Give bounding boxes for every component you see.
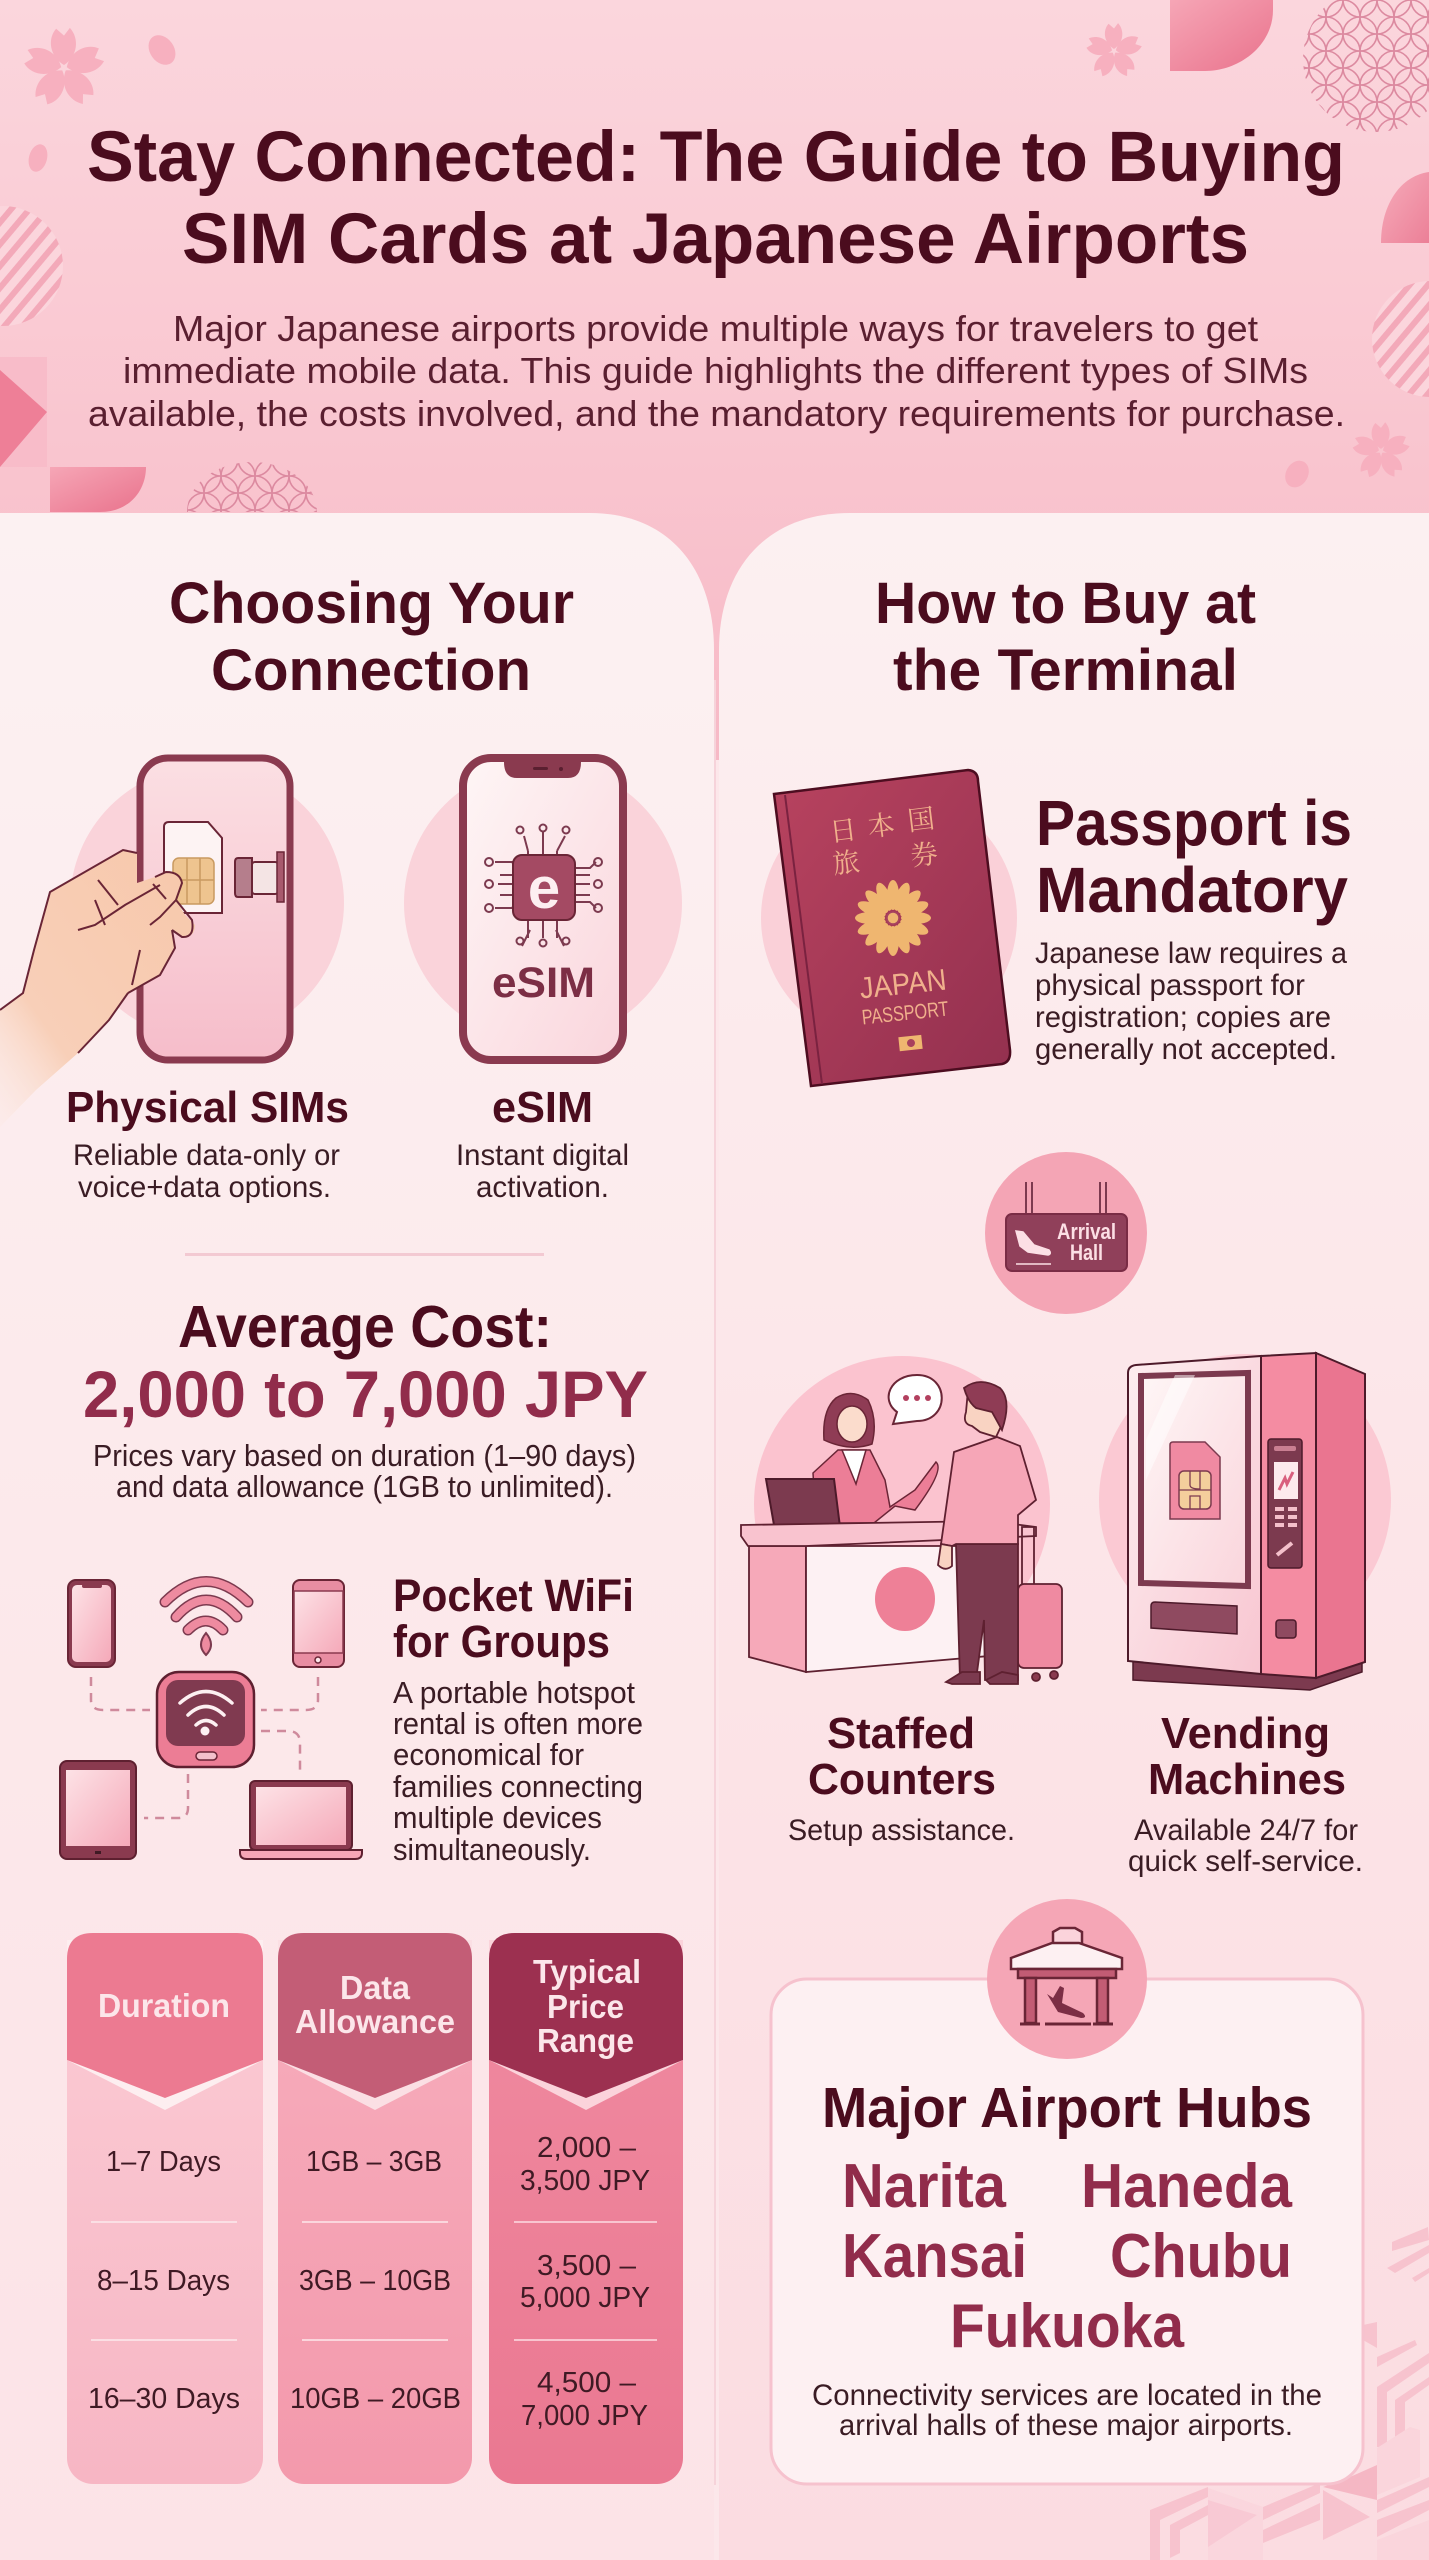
pocket WiFi text: economical for <box>393 1737 584 1772</box>
striped circle right <box>1372 281 1429 397</box>
chevron square left <box>0 357 47 467</box>
speech bubble <box>889 1375 942 1424</box>
row values: 3,500 – <box>537 2250 637 2282</box>
circuit traces <box>485 824 602 946</box>
label: vending machines: Vending <box>1161 1709 1330 1758</box>
label: physical SIMs: voice+data options. <box>78 1171 331 1204</box>
pink D shape <box>1170 0 1273 71</box>
airport names: Fukuoka <box>950 2292 1184 2361</box>
section heading: how to buy at the terminal: How to Buy at <box>875 571 1256 636</box>
label: eSIM: activation. <box>476 1171 609 1204</box>
column header <box>489 1933 683 2110</box>
column header: Allowance <box>295 2003 455 2040</box>
icon: arrival hall sign: Arrival <box>1057 1219 1116 1244</box>
chip with e: e <box>528 856 560 921</box>
hand outline <box>0 850 193 1053</box>
column header: Range <box>537 2022 634 2059</box>
row values: 16–30 Days <box>88 2383 240 2415</box>
label: eSIM: eSIM <box>492 1083 593 1132</box>
average cost block: Prices vary based on duration (1–90 days) <box>93 1438 636 1473</box>
column header: Data <box>340 1969 411 2006</box>
SIM card <box>164 822 222 913</box>
panel: choosing your connection <box>0 513 714 2560</box>
passport text: Japanese law requires a <box>1035 937 1347 970</box>
illustration: vending machine <box>1099 1353 1391 1690</box>
japanese characters <box>827 797 940 882</box>
title: Stay Connected: The Guide to Buying <box>87 118 1345 197</box>
eSIM label on phone: eSIM <box>492 959 595 1007</box>
label: staffed counters <box>788 1709 1015 1847</box>
passport text: Mandatory <box>1036 854 1348 926</box>
label: eSIM: Instant digital <box>456 1139 629 1172</box>
row values: 3GB – 10GB <box>299 2265 451 2297</box>
icon: cherry blossom top right <box>1085 23 1143 79</box>
panel: how to buy at the terminal <box>719 513 1429 2560</box>
phone body <box>463 758 623 1060</box>
laptop <box>240 1781 362 1859</box>
phone left <box>68 1580 115 1667</box>
spine line <box>785 795 822 1084</box>
pocket WiFi text: A portable hotspot <box>393 1675 635 1710</box>
average cost block: 2,000 to 7,000 JPY <box>83 1357 648 1431</box>
phone <box>140 758 290 1060</box>
section heading: choosing your connection: Connection <box>211 638 531 703</box>
wifi icon <box>165 1582 248 1655</box>
icon: petal right <box>1280 456 1314 492</box>
label: physical SIMs <box>66 1083 349 1204</box>
hub note: Connectivity services are located in the <box>812 2379 1322 2412</box>
average cost block: Average Cost: <box>178 1294 552 1360</box>
passport text: Passport is <box>1036 787 1352 859</box>
passport text: physical passport for <box>1035 969 1305 1002</box>
intro paragraph <box>88 308 1345 434</box>
pocket WiFi text: multiple devices <box>393 1800 602 1835</box>
illustration: pocket WiFi network <box>60 1580 362 1859</box>
airport names: Kansai <box>842 2222 1027 2291</box>
japanese characters: 日 <box>827 808 859 850</box>
illustration: physical SIM phone and hand <box>0 758 344 1127</box>
passport text <box>1035 787 1352 1066</box>
illustration: passport <box>761 770 1017 1086</box>
icon: arrival hall sign <box>985 1152 1147 1314</box>
column body <box>67 1933 263 2484</box>
traveller <box>938 1382 1062 1684</box>
label: vending machines <box>1128 1709 1363 1878</box>
label: physical SIMs: Physical SIMs <box>66 1083 349 1132</box>
passport wording: JAPAN <box>858 964 948 1005</box>
label: vending machines: Machines <box>1148 1755 1346 1804</box>
label: staffed counters: Staffed <box>827 1709 975 1758</box>
icon: airport terminal <box>987 1899 1147 2059</box>
dashed connectors <box>91 1677 318 1818</box>
chrysanthemum emblem <box>855 880 931 956</box>
row values <box>88 2146 240 2415</box>
icon: cherry blossom right <box>1351 422 1411 480</box>
row values: 1GB – 3GB <box>306 2146 442 2178</box>
airport names <box>842 2152 1292 2361</box>
tablet <box>60 1761 136 1859</box>
shippo half circle bottom <box>187 462 317 512</box>
average cost block: and data allowance (1GB to unlimited). <box>116 1469 613 1504</box>
background circle <box>404 764 682 1042</box>
label: eSIM <box>456 1083 629 1204</box>
column header: Duration <box>98 1987 230 2024</box>
section heading: how to buy at the terminal: the Terminal <box>893 638 1238 703</box>
japanese characters: 券 <box>908 832 940 874</box>
title: SIM Cards at Japanese Airports <box>182 200 1249 279</box>
japanese characters: 旅 <box>830 840 862 882</box>
illustration: staffed counter <box>741 1356 1062 1684</box>
shippo circle top right <box>1303 0 1429 132</box>
label: physical SIMs: Reliable data-only or <box>73 1139 340 1172</box>
agent <box>813 1393 938 1523</box>
hub note: arrival halls of these major airports. <box>839 2409 1293 2442</box>
japanese characters: 本 <box>865 803 897 845</box>
column header <box>278 1933 472 2110</box>
icon: cherry blossom top left <box>22 28 106 108</box>
table column: data allowance <box>278 1933 472 2484</box>
hub note <box>812 2379 1322 2442</box>
row values: 5,000 JPY <box>520 2282 650 2314</box>
airport names: Haneda <box>1081 2152 1292 2221</box>
table column: duration <box>67 1933 263 2484</box>
column header: Price <box>547 1988 624 2025</box>
icon: petal left <box>26 142 50 174</box>
passport cover <box>774 770 1010 1086</box>
biometric chip symbol <box>898 1035 923 1051</box>
passport text: registration; copies are <box>1035 1001 1331 1034</box>
row values <box>520 2132 650 2432</box>
control panel <box>1268 1439 1302 1568</box>
chip with e <box>513 855 575 921</box>
monitor <box>766 1479 840 1527</box>
intro paragraph: Major Japanese airports provide multiple ways for travelers to get <box>173 308 1258 349</box>
pocket WiFi text: rental is often more <box>393 1706 643 1741</box>
header background <box>0 0 1429 760</box>
row values: 7,000 JPY <box>521 2400 648 2432</box>
label: staffed counters: Counters <box>808 1755 996 1804</box>
section heading: choosing your connection <box>169 571 574 703</box>
coin return <box>1276 1620 1296 1638</box>
table column: typical price range <box>489 1933 683 2484</box>
pocket WiFi text <box>393 1570 643 1867</box>
SIM on screen <box>1170 1442 1220 1519</box>
background circle <box>1099 1354 1391 1646</box>
label: vending machines: quick self-service. <box>1128 1845 1363 1878</box>
intro paragraph: immediate mobile data. This guide highlights the different types of SIMs <box>123 350 1308 391</box>
row values <box>290 2146 461 2415</box>
row values: 1–7 Days <box>106 2146 221 2178</box>
card <box>771 1979 1363 2484</box>
label: vending machines: Available 24/7 for <box>1134 1814 1358 1847</box>
section heading: how to buy at the terminal <box>875 571 1256 703</box>
passport text: generally not accepted. <box>1035 1033 1337 1066</box>
retrieval slot <box>1151 1602 1237 1634</box>
cabinet <box>1128 1353 1365 1678</box>
pocket WiFi text: families connecting <box>393 1769 643 1804</box>
average cost block <box>83 1294 648 1504</box>
row values: 10GB – 20GB <box>290 2383 461 2415</box>
background circle <box>70 766 344 1040</box>
japanese characters: 国 <box>905 797 937 839</box>
column header <box>67 1933 263 2110</box>
background circle <box>754 1356 1050 1652</box>
rounded square left <box>50 467 146 512</box>
airport names: Chubu <box>1110 2222 1292 2291</box>
icon: arrival hall sign: Hall <box>1070 1240 1103 1265</box>
row values: 2,000 – <box>537 2132 637 2164</box>
hub heading: Major Airport Hubs <box>822 2076 1312 2140</box>
pocket WiFi text: for Groups <box>393 1616 610 1667</box>
plane <box>1047 1986 1085 2018</box>
counter <box>741 1521 1036 1672</box>
column body <box>278 1933 472 2484</box>
notch <box>504 762 581 778</box>
pocket router <box>157 1672 254 1767</box>
hand <box>0 850 195 1127</box>
striped circle left <box>0 206 63 326</box>
phone right <box>293 1580 344 1667</box>
column body <box>489 1933 683 2484</box>
row values: 4,500 – <box>537 2367 637 2399</box>
pocket WiFi text: Pocket WiFi <box>393 1570 634 1621</box>
airport names: Narita <box>842 2152 1006 2221</box>
pink quarter right <box>1381 172 1429 243</box>
pocket WiFi text: simultaneously. <box>393 1832 591 1867</box>
label: staffed counters: Setup assistance. <box>788 1814 1015 1847</box>
icon: petal <box>143 30 181 70</box>
row values: 8–15 Days <box>97 2265 230 2297</box>
glass screen <box>1141 1373 1248 1586</box>
SIM tray <box>235 852 284 902</box>
intro paragraph: available, the costs involved, and the mandatory requirements for purchase. <box>88 393 1345 434</box>
passport wording: PASSPORT <box>861 997 950 1029</box>
SIM chip <box>173 858 214 904</box>
passport wording <box>858 964 950 1029</box>
plane icon <box>1016 1231 1051 1264</box>
column header: Typical <box>533 1953 641 1990</box>
illustration: eSIM phone <box>404 758 682 1060</box>
decorative geometric pattern bottom right <box>1150 2227 1429 2560</box>
background circle <box>761 790 1017 1046</box>
panel: major airport hubs <box>771 1899 1363 2484</box>
suitcase <box>1018 1527 1062 1681</box>
base <box>1133 1652 1362 1690</box>
title <box>87 118 1345 279</box>
section heading: choosing your connection: Choosing Your <box>169 571 574 636</box>
row values: 3,500 JPY <box>520 2165 650 2197</box>
decorations: header corners <box>0 0 1429 512</box>
